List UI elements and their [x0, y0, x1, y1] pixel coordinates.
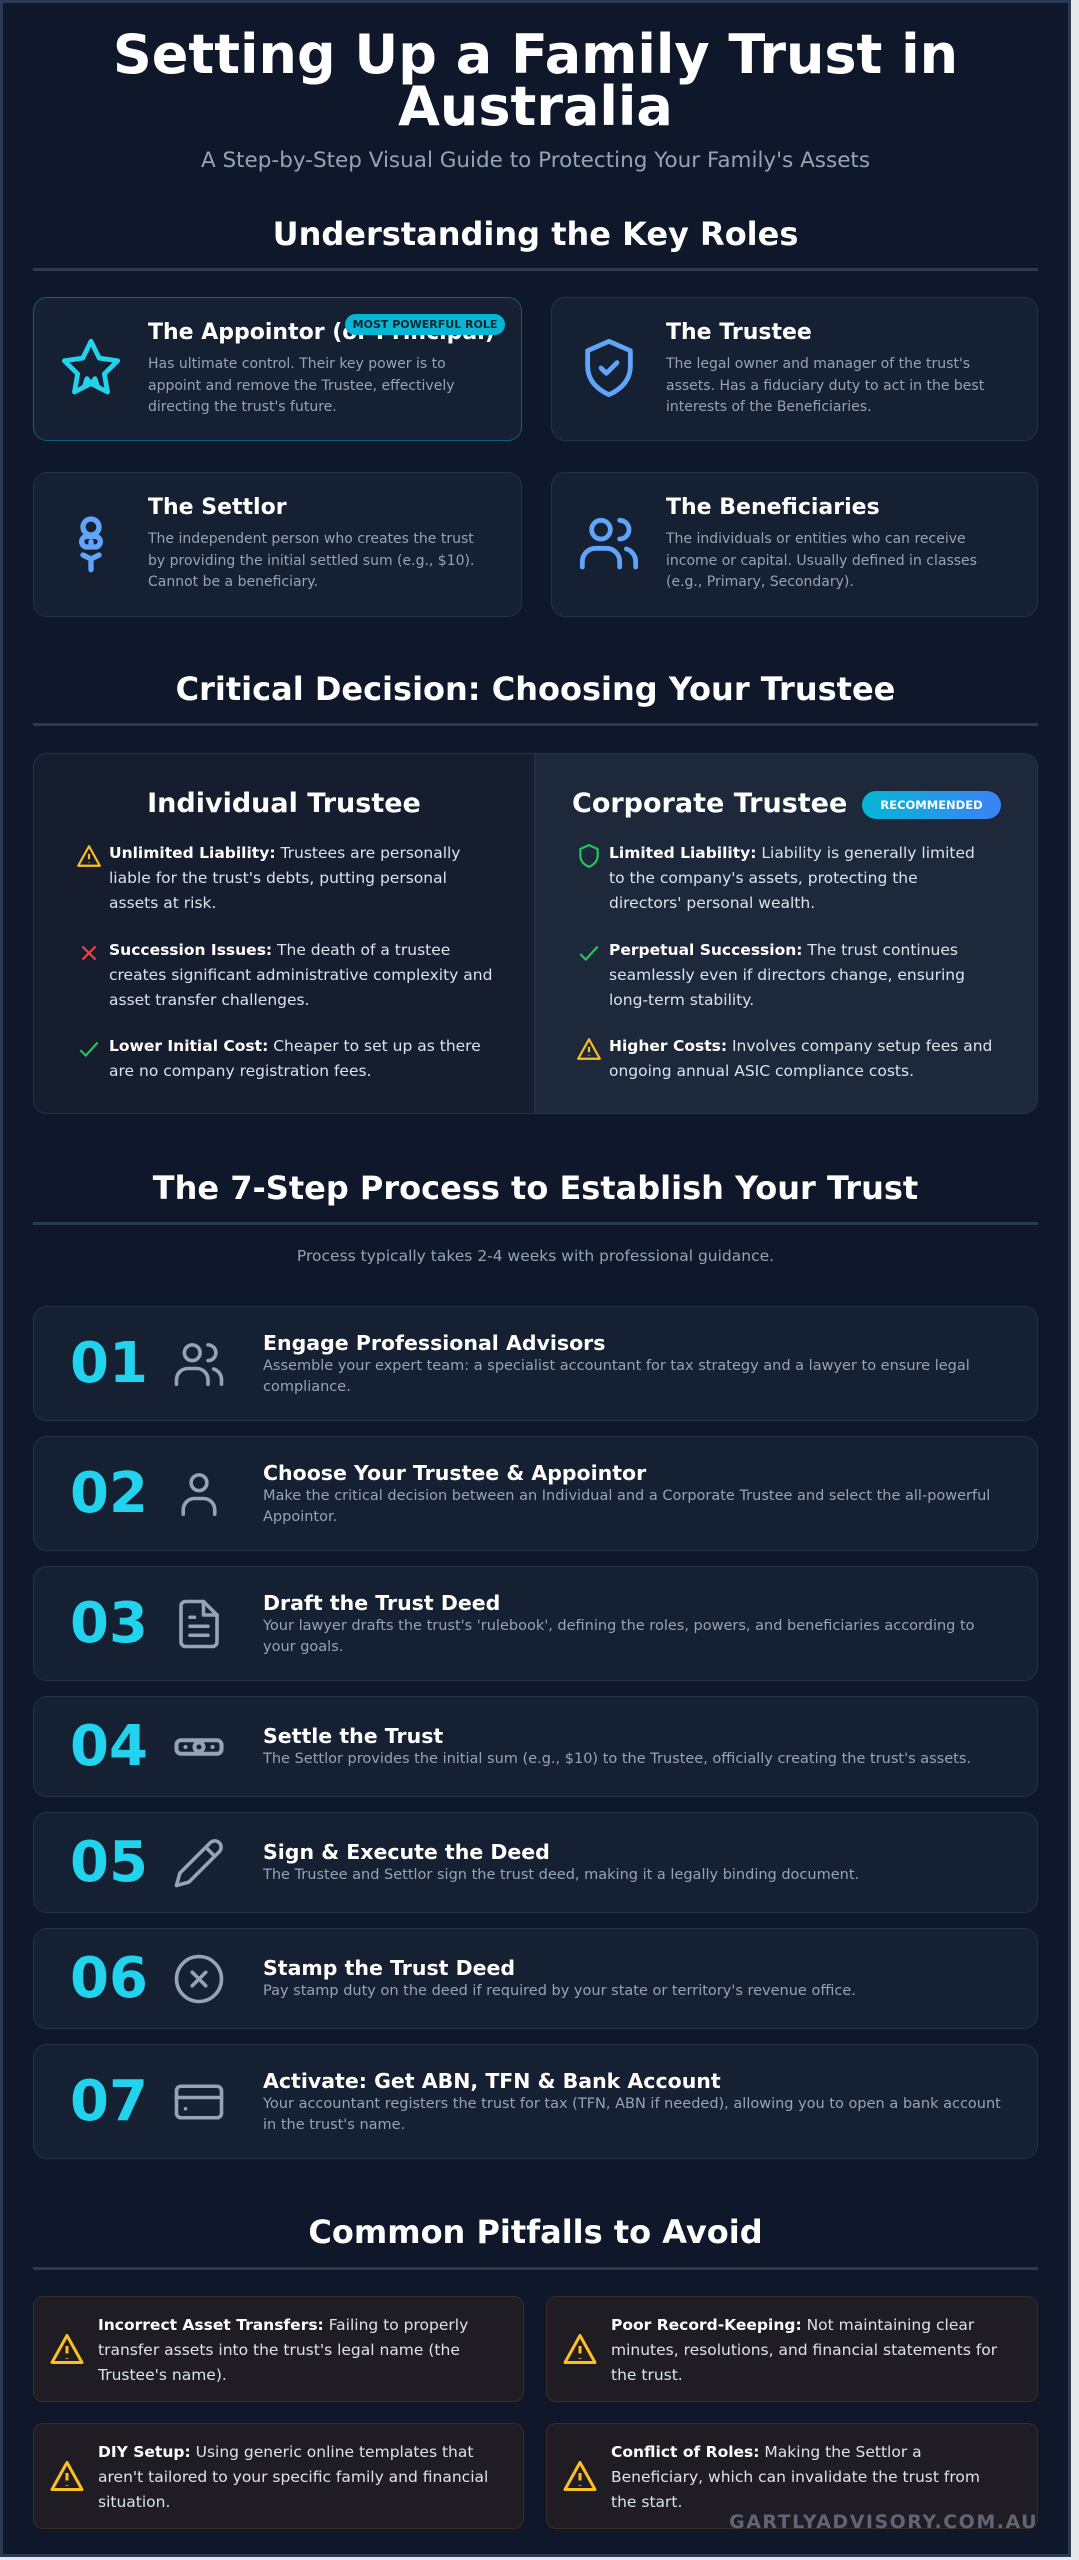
- card: appointor: [33, 297, 522, 441]
- step 03: Your lawyer drafts the trust's 'rulebook', defining the roles, powers, and beneficiaries according to your goals.: [263, 1618, 975, 1654]
- item: limited liability: Limited Liability: Liability is generally limited to the company's assets, protecting the directors' personal wealth.: [609, 844, 975, 912]
- badge: [345, 314, 505, 335]
- step 04: 04: [70, 1714, 148, 1778]
- icon: users: [174, 1343, 224, 1386]
- title: [113, 23, 958, 138]
- step 05: 05: [70, 1830, 148, 1894]
- icon: document: [179, 1600, 219, 1648]
- pitfall: conflict of roles: Conflict of Roles: Making the Settlor a Beneficiary, which can invalidate the trust from the start.: [611, 2443, 980, 2511]
- step 07: [33, 2044, 1038, 2159]
- step 06: Pay stamp duty on the deed if required by your state or territory's revenue office.: [263, 1983, 856, 1999]
- icon: user: [181, 1473, 217, 1516]
- step 07: Your accountant registers the trust for tax (TFN, ABN if needed), allowing you to open a bank account in the trust's name.: [263, 2096, 1001, 2132]
- step 03: Draft the Trust Deed: [263, 1590, 500, 1614]
- heading: individual: Individual Trustee: [147, 788, 421, 819]
- watermark: GARTLYADVISORY.COM.AU: [729, 2511, 1038, 2533]
- item: succession issues: Succession Issues: The death of a trustee creates significant administrative complexity and asset transfer challenges.: [109, 941, 492, 1009]
- icon: x-circle: [174, 1954, 224, 2004]
- step 06: [33, 1928, 1038, 2029]
- step 03: [33, 1566, 1038, 1681]
- step 01: Assemble your expert team: a specialist accountant for tax strategy and a lawyer to ensure legal compliance.: [263, 1358, 970, 1394]
- step 04: The Settlor provides the initial sum (e.g., $10) to the Trustee, officially creating the trust's assets.: [263, 1751, 971, 1767]
- heading: 7-step process: The 7-Step Process to Establish Your Trust: [153, 1169, 918, 1207]
- step 04: Settle the Trust: [263, 1724, 443, 1748]
- pitfall: DIY setup: DIY Setup: Using generic online templates that aren't tailored to your specific family and financial situation.: [98, 2443, 488, 2511]
- step 04: [33, 1696, 1038, 1797]
- badge: recommended: RECOMMENDED: [880, 798, 983, 812]
- pitfall: conflict of roles: [546, 2423, 1038, 2529]
- pitfall: incorrect asset transfers: [33, 2296, 524, 2402]
- pitfall: poor record-keeping: Poor Record-Keeping: Not maintaining clear minutes, resolutions, and financial statements for the trust.: [611, 2316, 997, 2384]
- pitfall: incorrect asset transfers: Incorrect Asset Transfers: Failing to properly transfer assets into the trust's legal name (the Trustee's name).: [98, 2316, 468, 2384]
- title: The Beneficiaries: [666, 495, 880, 520]
- card: trustee: [551, 297, 1038, 441]
- step 05: [33, 1812, 1038, 1913]
- badge: MOST POWERFUL ROLE: [353, 318, 497, 331]
- icon: credit card: [174, 2084, 224, 2120]
- step 02: 02: [70, 1460, 148, 1526]
- step 07: 07: [70, 2068, 148, 2134]
- step 02: Make the critical decision between an Individual and a Corporate Trustee and select the all-powerful Appointor.: [263, 1488, 990, 1524]
- item: unlimited liability: Unlimited Liability: Trustees are personally liable for the trust's debts, putting personal assets at risk.: [109, 844, 460, 912]
- title: The Appointor (or Principal): [148, 320, 495, 345]
- subtitle: A Step-by-Step Visual Guide to Protecting Your Family's Assets: [201, 148, 870, 173]
- item: lower initial cost: Lower Initial Cost: Cheaper to set up as there are no company registration fees.: [109, 1037, 481, 1080]
- card: settlor: [33, 472, 522, 617]
- step 06: Stamp the Trust Deed: [263, 1956, 515, 1980]
- step 06: 06: [70, 1946, 148, 2010]
- step 05: The Trustee and Settlor sign the trust deed, making it a legally binding document.: [263, 1867, 859, 1883]
- icon: star: [62, 338, 120, 394]
- step 05: Sign & Execute the Deed: [263, 1840, 550, 1864]
- icon: settlor: [79, 516, 103, 572]
- panel: trustee comparison: [33, 753, 1038, 1114]
- title: The Settlor: [148, 495, 287, 520]
- pitfall: poor record-keeping: [546, 2296, 1038, 2402]
- description: Has ultimate control. Their key power is to appoint and remove the Trustee, effectively directing the trust's future.: [148, 356, 455, 415]
- step 02: [33, 1436, 1038, 1551]
- icon: pencil: [174, 1839, 223, 1888]
- step 07: Activate: Get ABN, TFN & Bank Account: [263, 2068, 721, 2092]
- icon: users: [580, 518, 638, 570]
- step 02: Choose Your Trustee & Appointor: [263, 1460, 646, 1484]
- card: beneficiaries: [551, 472, 1038, 617]
- step 01: Engage Professional Advisors: [263, 1330, 606, 1354]
- step 03: 03: [70, 1590, 148, 1656]
- column: corporate background: [534, 754, 1039, 1115]
- description: The individuals or entities who can receive income or capital. Usually defined in classes (e.g., Primary, Secondary).: [666, 531, 977, 590]
- icon: shield: [585, 338, 633, 398]
- heading: choosing trustee: Critical Decision: Choosing Your Trustee: [176, 670, 895, 708]
- heading: pitfalls: Common Pitfalls to Avoid: [308, 2213, 763, 2251]
- title: Setting Up a Family Trust in: [113, 23, 958, 86]
- step 01: [33, 1306, 1038, 1421]
- step 01: 01: [70, 1330, 148, 1396]
- description: The independent person who creates the trust by providing the initial settled sum (e.g., $10). Cannot be a beneficiary.: [148, 531, 474, 590]
- item: higher costs: Higher Costs: Involves company setup fees and ongoing annual ASIC compliance costs.: [609, 1037, 992, 1080]
- heading: key roles: Understanding the Key Roles: [273, 215, 798, 253]
- badge: recommended: [862, 791, 1001, 819]
- title: The Trustee: [666, 320, 812, 345]
- description: The legal owner and manager of the trust's assets. Has a fiduciary duty to act in the best interests of the Beneficiaries.: [666, 356, 984, 415]
- item: perpetual succession: Perpetual Succession: The trust continues seamlessly even if directors change, ensuring long-term stability.: [609, 941, 965, 1009]
- pitfall: DIY setup: [33, 2423, 524, 2529]
- title: Australia: [398, 75, 673, 138]
- process note: Process typically takes 2-4 weeks with professional guidance.: [297, 1247, 774, 1265]
- heading: corporate: Corporate Trustee: [572, 788, 847, 819]
- icon: banknote: [174, 1738, 224, 1756]
